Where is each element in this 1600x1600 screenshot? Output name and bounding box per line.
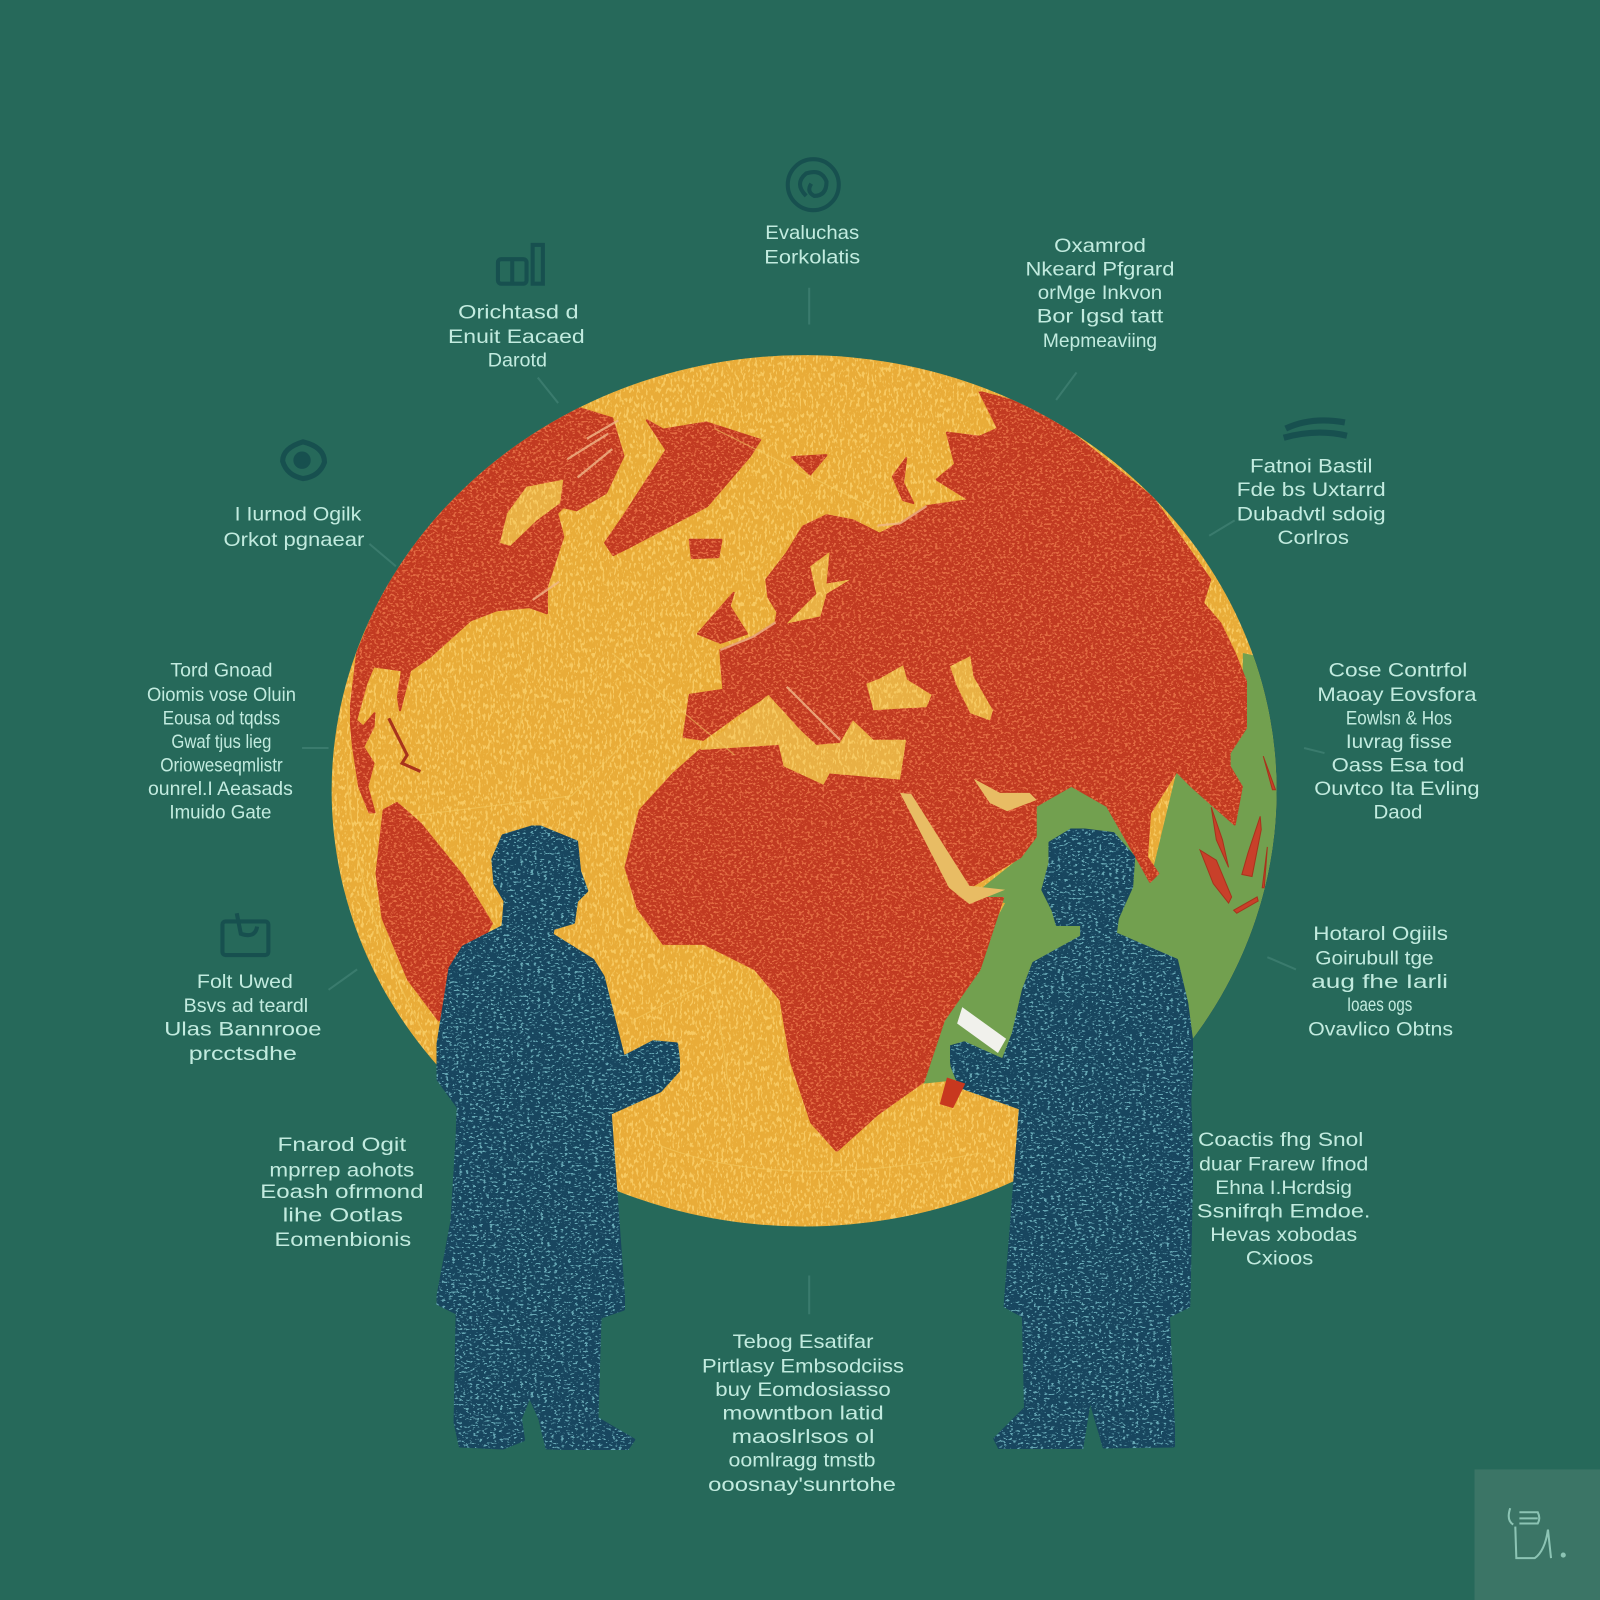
text: right upper <box>1237 455 1386 549</box>
text: right upper: Fde bs Uxtarrd <box>1237 479 1386 501</box>
text: top: Evaluchas <box>765 222 859 244</box>
landmass: arctic island <box>792 455 827 474</box>
text: bottom left: Eomenbionis <box>274 1229 411 1251</box>
text: bottom right: Ehna I.Hcrdsig <box>1215 1177 1352 1199</box>
text: right middle <box>1314 660 1480 823</box>
text: bottom right: Ssnifrqh Emdoe. <box>1197 1200 1370 1222</box>
text: right middle: Iuvrag fisse <box>1346 731 1452 753</box>
text: right lower: Ioaes ogs <box>1347 994 1412 1016</box>
text: left middle: ounrel.I Aeasads <box>148 778 293 800</box>
text: left lower: Bsvs ad teardl <box>184 995 308 1017</box>
globe <box>327 347 1288 1235</box>
text: bottom centre: mowntbon latid <box>722 1402 884 1424</box>
text: right lower: Ovavlico Obtns <box>1308 1019 1453 1041</box>
text: upper right: Oxamrod <box>1054 235 1146 257</box>
text: bottom right <box>1197 1129 1370 1269</box>
text: bottom centre: ooosnay'sunrtohe <box>708 1474 896 1496</box>
water: red sea <box>900 793 1005 904</box>
text: bottom centre: buy Eomdosiasso <box>715 1379 891 1401</box>
landmass: britain group <box>698 593 747 643</box>
water bodies in yellow <box>500 480 993 785</box>
long yellow strands <box>347 429 980 1171</box>
text: left middle: Gwaf tjus lieg <box>171 731 271 753</box>
text: top: Eorkolatis <box>764 246 860 268</box>
text: top <box>764 222 860 268</box>
text: bottom left: mprrep aohots <box>269 1160 414 1182</box>
text: left lower: prcctsdhe <box>189 1043 297 1065</box>
text: bottom centre: Pirtlasy Embsodciiss <box>702 1355 904 1377</box>
landmass: novaya zemlya <box>893 458 913 503</box>
water: baltic <box>787 552 850 623</box>
text: right middle: Ouvtco Ita Evling <box>1314 778 1480 800</box>
text: bottom left <box>260 1134 423 1251</box>
text: right lower: Goirubull tge <box>1315 947 1434 969</box>
text: left upper: I Iurnod Ogilk <box>235 503 362 525</box>
text: upper right: orMge Inkvon <box>1038 282 1162 304</box>
text: upper right: Nkeard Pfgrard <box>1026 259 1174 281</box>
watermark badge <box>1474 1469 1600 1600</box>
text: left lower: Folt Uwed <box>197 971 293 993</box>
landmass: north america <box>350 398 623 812</box>
text: right lower: Hotarol Ogiils <box>1313 923 1448 945</box>
icon: bag and building <box>498 245 543 284</box>
pale coast strands <box>533 420 927 740</box>
text: bottom centre: maoslrlsos ol <box>732 1426 874 1448</box>
text: upper right <box>1026 235 1174 352</box>
text: right upper: Fatnoi Bastil <box>1250 455 1372 477</box>
figure: right man <box>950 829 1193 1449</box>
landmass: south america <box>377 803 492 1020</box>
text: upper right: Bor Igsd tatt <box>1037 305 1164 327</box>
text: upper left: Enuit Eacaed <box>448 326 585 348</box>
text: right middle: Maoay Eovsfora <box>1317 684 1477 706</box>
text: bottom right: Coactis fhg Snol <box>1198 1129 1363 1151</box>
text: left middle: Eousa od tqdss <box>163 707 280 729</box>
icon: red object in right hand <box>940 1078 965 1108</box>
water: persian gulf <box>973 779 1037 811</box>
icon: shield heart <box>283 442 324 479</box>
text: right lower <box>1308 923 1453 1041</box>
text: bottom right: Cxioos <box>1246 1247 1313 1269</box>
text: upper left: Darotd <box>488 349 547 371</box>
icon: paper held by right man <box>957 1007 1006 1053</box>
text: left upper <box>223 503 365 551</box>
icon: waves <box>1284 420 1347 438</box>
icon: watermark glyph <box>1509 1508 1565 1558</box>
water: caspian <box>950 656 993 720</box>
text: bottom left: Eoash ofrmond <box>260 1181 423 1203</box>
text: bottom centre <box>702 1331 904 1496</box>
text: left upper: Orkot pgnaear <box>223 529 365 551</box>
figure: left man <box>437 826 680 1450</box>
text: bottom left: lihe Ootlas <box>283 1204 403 1226</box>
landmass: iceland <box>690 540 721 558</box>
text: left middle: Tord Gnoad <box>170 660 272 682</box>
text: upper right: Mepmeaviing <box>1043 330 1157 352</box>
text: right upper: Corlros <box>1278 527 1349 549</box>
water: black sea <box>866 665 932 710</box>
text: right middle: Eowlsn & Hos <box>1346 707 1452 729</box>
landmasses in red <box>350 392 1247 1151</box>
text: bottom left: Fnarod Ogit <box>278 1134 407 1156</box>
text: bottom centre: oomlragg tmstb <box>729 1449 876 1471</box>
text: left middle: Orioweseqmlistr <box>160 754 283 776</box>
text: left middle: Oiomis vose Oluin <box>147 684 296 706</box>
text: bottom centre: Tebog Esatifar <box>733 1331 874 1353</box>
text: right middle: Daod <box>1373 801 1422 823</box>
landmass: eurasia <box>684 392 1247 888</box>
text: right lower: aug fhe Iarli <box>1311 971 1448 993</box>
icon: spiral <box>788 159 839 210</box>
text: left middle <box>147 660 296 823</box>
text: left lower: Ulas Bannrooe <box>164 1019 321 1041</box>
text: left middle: Imuido Gate <box>169 801 271 823</box>
landmass: greenland <box>605 420 760 555</box>
text: upper left: Orichtasd d <box>458 301 579 323</box>
thin caribbean coast <box>389 718 420 771</box>
landmass: africa <box>626 745 1003 1151</box>
text: right upper: Dubadvtl sdoig <box>1237 503 1386 525</box>
text: bottom right: Hevas xobodas <box>1210 1224 1357 1246</box>
text: right middle: Cose Contrfol <box>1329 660 1467 682</box>
text: left lower <box>164 971 321 1065</box>
icon: box <box>222 913 268 955</box>
ocean: green indian ocean <box>923 653 1288 1084</box>
connector lines <box>302 288 1324 1314</box>
landmass: south east asia <box>1200 756 1276 913</box>
text: right middle: Oass Esa tod <box>1332 754 1464 776</box>
text: bottom right: duar Frarew Ifnod <box>1199 1153 1368 1175</box>
water: mediterranean <box>700 695 906 785</box>
text: upper left <box>448 301 585 371</box>
water: hudson bay <box>500 480 563 546</box>
